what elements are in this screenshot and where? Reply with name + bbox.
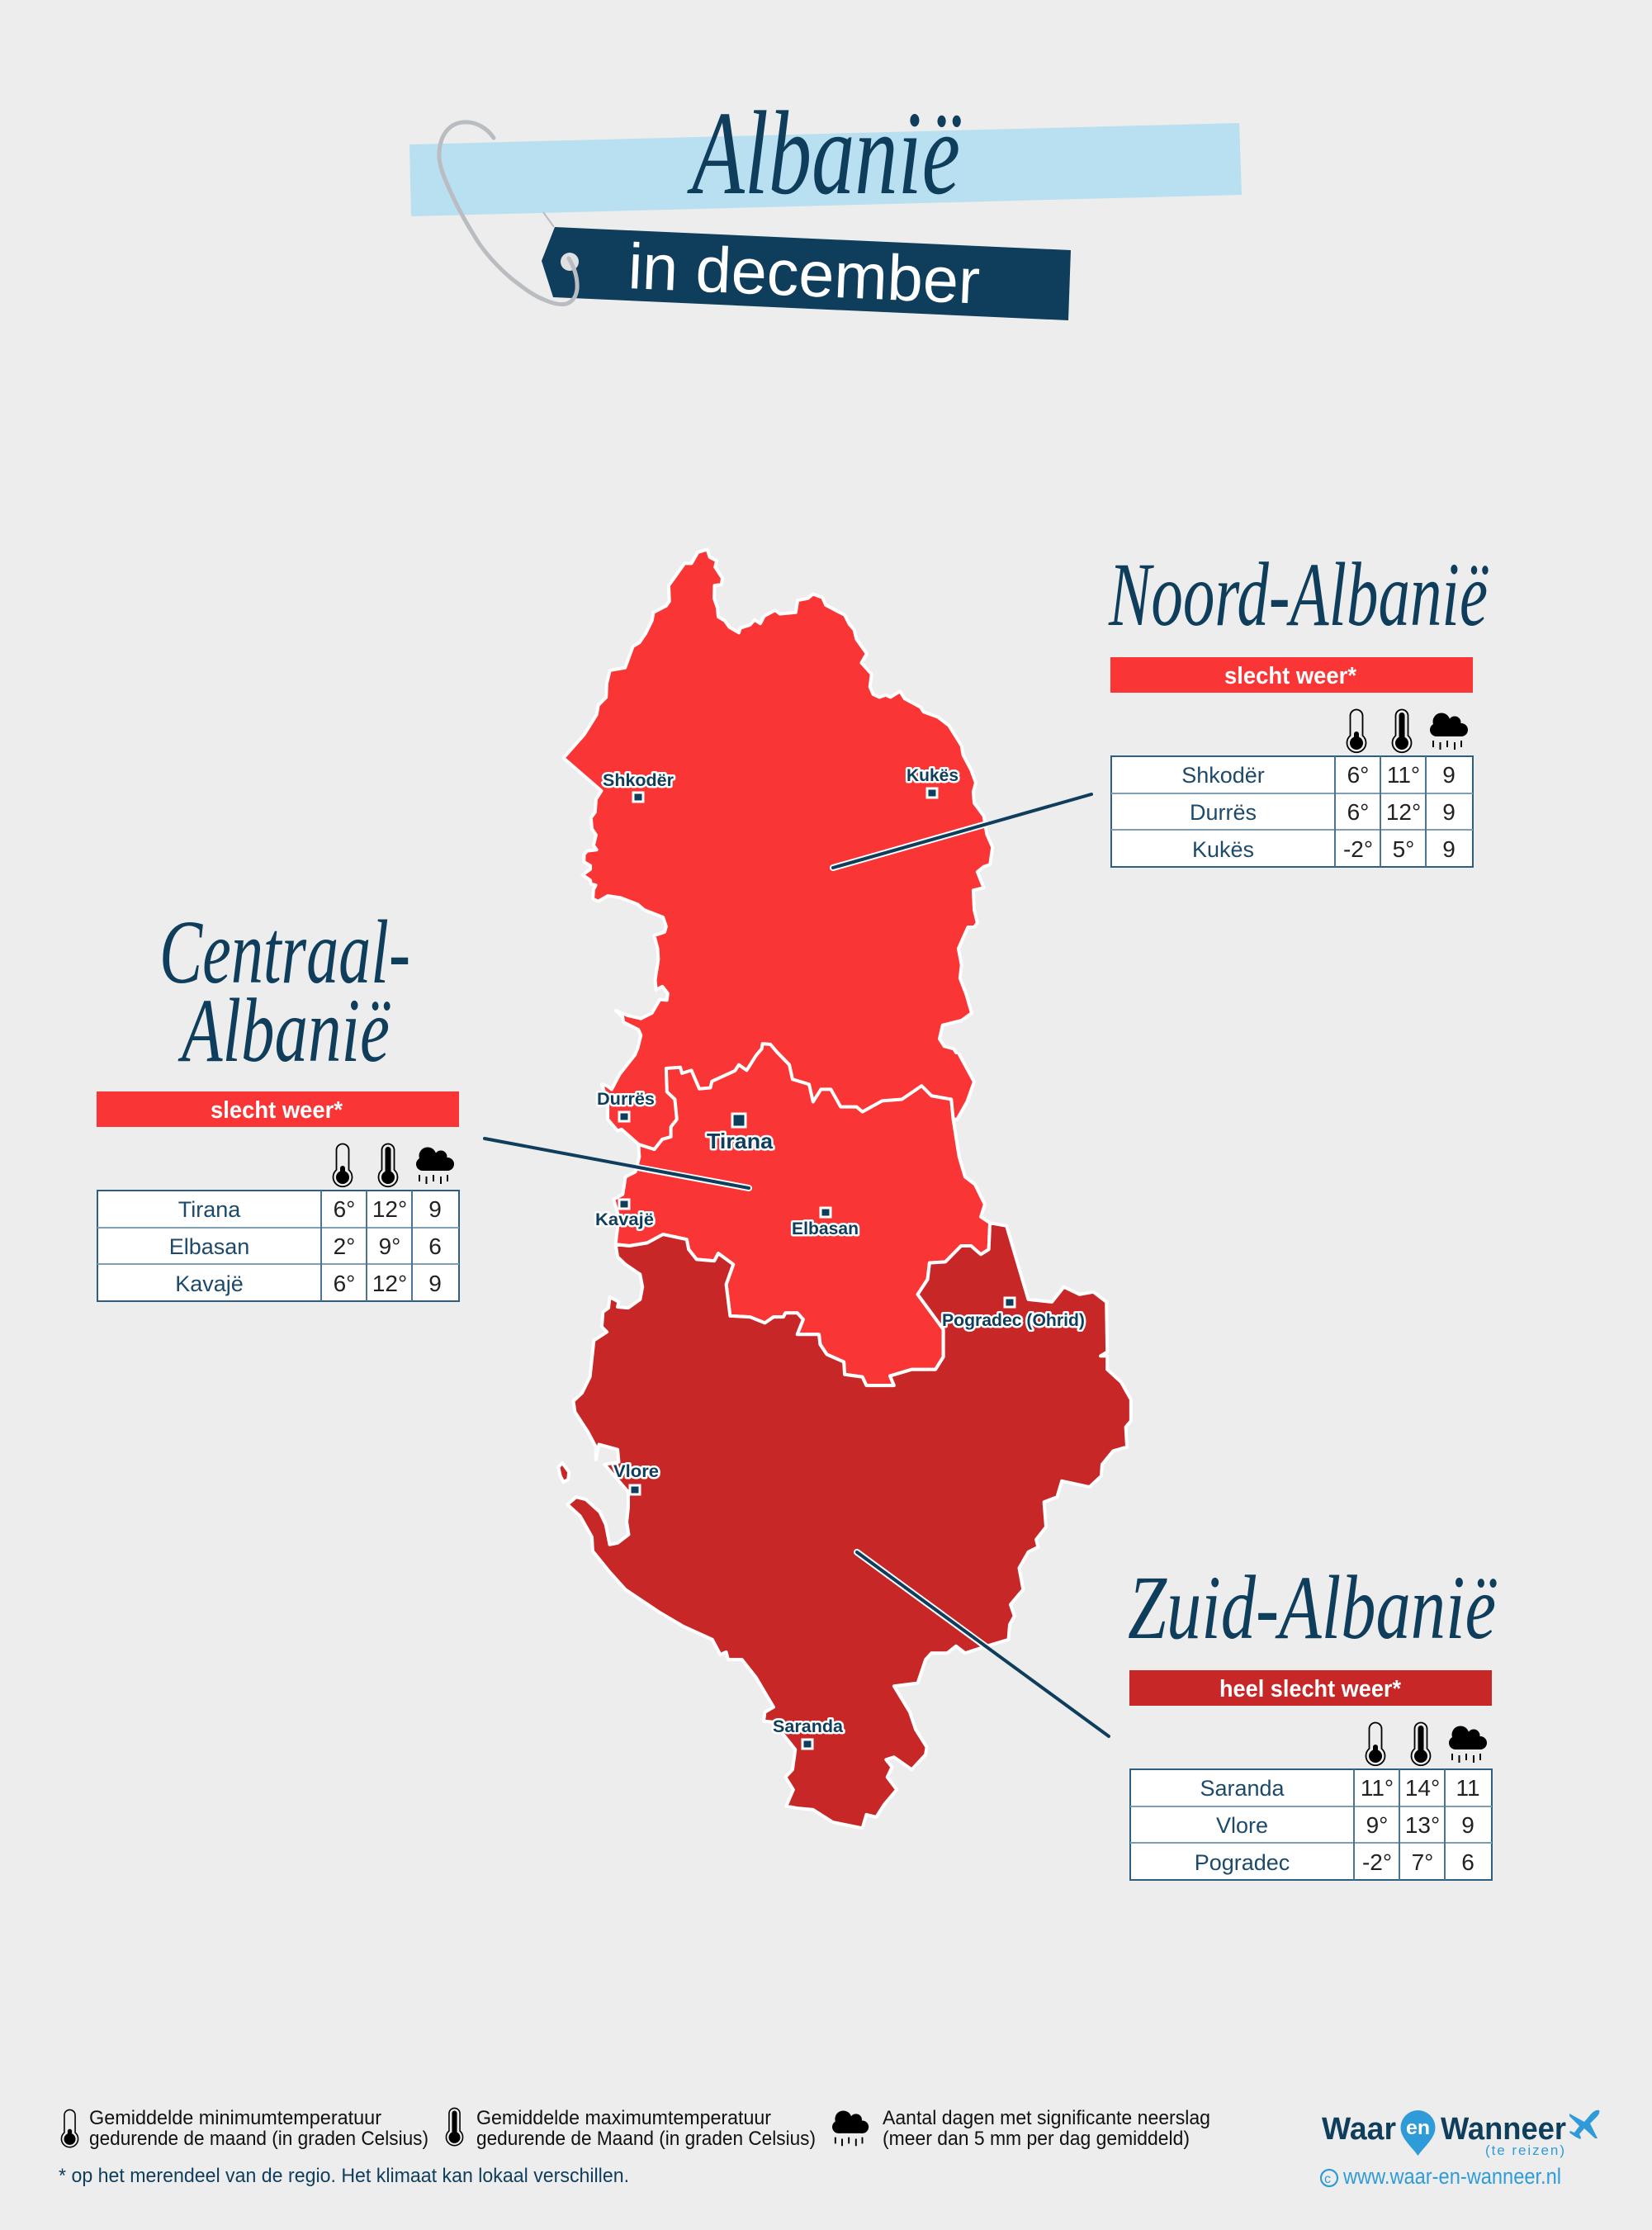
city: Kavajë xyxy=(595,1200,654,1229)
legend text: min temperature xyxy=(89,2107,428,2150)
icon: min temperature xyxy=(334,1144,352,1186)
climate table: 9° xyxy=(1366,1812,1388,1838)
climate table: Vlore xyxy=(1216,1813,1268,1838)
banner text: slecht weer* xyxy=(1224,663,1357,689)
panel: Centraal-Albanië xyxy=(97,1091,459,1301)
climate table: 5° xyxy=(1393,836,1414,862)
city: Tirana: Tirana xyxy=(707,1129,774,1153)
climate table: 9 xyxy=(428,1271,442,1296)
weather banner xyxy=(1129,1670,1492,1706)
logo word: Waar: Waar xyxy=(1322,2112,1396,2147)
weather banner xyxy=(97,1091,459,1127)
climate table: 9 xyxy=(1442,762,1456,788)
website: www.waar-en-wanneer.nl xyxy=(1342,2164,1561,2189)
weather banner xyxy=(1110,657,1473,693)
climate table xyxy=(1130,1769,1492,1880)
climate table: -2° xyxy=(1343,836,1373,862)
city: Pogradec xyxy=(942,1298,1085,1330)
legend text: min temperature: gedurende de maand (in graden Celsius) xyxy=(89,2128,428,2150)
legend text: rain days xyxy=(883,2107,1210,2150)
leader line: north xyxy=(833,794,1091,868)
icon: rain cloud xyxy=(416,1148,454,1184)
icon: legend min temperature xyxy=(61,2109,78,2147)
region: north upper xyxy=(564,549,992,1061)
string behind band xyxy=(543,212,554,227)
footnote: * op het merendeel van de regio. Het klimaat kan lokaal verschillen. xyxy=(59,2165,629,2187)
climate table: 6 xyxy=(428,1233,442,1259)
city: Elbasan xyxy=(792,1208,859,1238)
climate table: 7° xyxy=(1412,1849,1433,1875)
city: Elbasan: Elbasan xyxy=(792,1219,859,1238)
climate table: 12° xyxy=(1386,799,1421,825)
city: Tirana xyxy=(707,1114,774,1153)
legend xyxy=(61,2107,1210,2150)
light blue band xyxy=(409,123,1242,216)
icon: rain cloud xyxy=(1430,713,1468,750)
climate table: 11° xyxy=(1387,762,1420,788)
climate table: 6° xyxy=(334,1271,355,1296)
banner text: heel slecht weer* xyxy=(1219,1676,1402,1702)
climate table: Kukës xyxy=(1192,837,1254,862)
climate table: 11° xyxy=(1361,1775,1394,1801)
climate table: 9 xyxy=(428,1196,442,1222)
city: Durrës xyxy=(597,1090,655,1121)
icon: max temperature xyxy=(1392,710,1412,752)
city: Kavajë: Kavajë xyxy=(595,1210,654,1229)
legend text: max temperature: gedurende de Maand (in graden Celsius) xyxy=(476,2128,816,2150)
island xyxy=(558,1463,569,1482)
city: Kukës: Kukës xyxy=(906,766,959,785)
icon: min temperature xyxy=(1347,710,1366,752)
legend text: rain days: (meer dan 5 mm per dag gemiddeld) xyxy=(883,2128,1190,2150)
legend text: max temperature: Gemiddelde maximumtemperatuur xyxy=(476,2107,771,2129)
climate table: Pogradec xyxy=(1195,1850,1290,1875)
icon: max temperature xyxy=(1412,1722,1430,1765)
climate table: 6° xyxy=(1347,799,1369,825)
banner text: slecht weer* xyxy=(211,1097,343,1124)
climate table: Shkodër xyxy=(1181,763,1265,788)
city: Vlore: Vlore xyxy=(613,1462,659,1481)
heading: Albanië xyxy=(687,88,961,220)
tag hole xyxy=(561,253,579,271)
legend text: max temperature xyxy=(476,2107,816,2150)
heading: Zuid-Albanië: Zuid-Albanië xyxy=(1128,1557,1497,1658)
copyright symbol: c xyxy=(1324,2172,1331,2186)
heading: Centraal-Albanië xyxy=(159,902,410,1081)
icon: rain cloud xyxy=(1449,1726,1487,1763)
title block xyxy=(409,88,1242,320)
ring xyxy=(439,122,577,305)
climate table: 12° xyxy=(372,1196,407,1222)
legend text: min temperature: Gemiddelde minimumtemperatuur xyxy=(89,2107,381,2129)
climate table: Elbasan xyxy=(169,1234,249,1259)
climate table: 2° xyxy=(334,1233,355,1259)
climate table: 14° xyxy=(1405,1775,1440,1801)
icon: legend max temperature xyxy=(446,2108,463,2146)
city: Saranda xyxy=(773,1717,843,1749)
panel: Zuid-Albanië xyxy=(1129,1670,1492,1880)
logo xyxy=(1321,2110,1599,2189)
climate table: 11 xyxy=(1456,1775,1480,1801)
copyright symbol xyxy=(1321,2170,1337,2186)
heading: Centraal-Albanië: Albanië xyxy=(178,980,391,1081)
climate table: 9 xyxy=(1461,1812,1474,1838)
climate table: 13° xyxy=(1405,1812,1440,1838)
climate table: 9 xyxy=(1442,836,1456,862)
legend text: rain days: Aantal dagen met significante neerslag xyxy=(883,2107,1210,2129)
region: south xyxy=(567,1223,1131,1828)
logo pin xyxy=(1400,2110,1435,2156)
panel: Noord-Albanië xyxy=(1110,657,1473,867)
climate table: Saranda xyxy=(1200,1776,1285,1801)
subheading: in december xyxy=(627,230,982,318)
logo word: Wanneer: Wanneer xyxy=(1441,2112,1566,2147)
icon: plane xyxy=(1569,2110,1599,2139)
icon: max temperature xyxy=(378,1144,398,1186)
regions: lower part xyxy=(558,1044,1131,1828)
logo pin: en xyxy=(1406,2117,1430,2139)
climate table: 9° xyxy=(379,1233,400,1259)
climate table: 9 xyxy=(1442,799,1456,825)
climate table: Kavajë xyxy=(175,1271,244,1296)
heading: Noord-Albanië: Noord-Albanië xyxy=(1108,544,1489,645)
city: Pogradec: Pogradec (Ohrid) xyxy=(942,1311,1085,1330)
climate table: 12° xyxy=(372,1271,407,1296)
icon: legend rain cloud xyxy=(832,2110,869,2146)
tag xyxy=(542,227,1071,320)
city: Kukës xyxy=(906,766,959,798)
climate table: 6° xyxy=(334,1196,355,1222)
city: Shkodër: Shkodër xyxy=(603,771,674,790)
climate table: -2° xyxy=(1362,1849,1392,1875)
city: Saranda: Saranda xyxy=(773,1717,843,1736)
leader line: central xyxy=(485,1139,749,1188)
climate table xyxy=(97,1191,459,1301)
icon: min temperature xyxy=(1366,1722,1385,1765)
heading: Centraal-Albanië: Centraal- xyxy=(159,902,410,1002)
city: Vlore xyxy=(613,1462,659,1494)
border north-central xyxy=(638,1044,954,1149)
map of Albania xyxy=(558,549,1131,1828)
climate table: Tirana xyxy=(178,1197,241,1222)
climate table: Durrës xyxy=(1190,800,1257,825)
city: Durrës: Durrës xyxy=(597,1090,655,1109)
city: Shkodër xyxy=(603,771,674,802)
climate table: 6 xyxy=(1461,1849,1474,1875)
climate table: 6° xyxy=(1347,762,1369,788)
leader line: south xyxy=(857,1552,1109,1736)
region: north lower and central xyxy=(602,1054,990,1385)
logo tagline: (te reizen) xyxy=(1485,2142,1564,2158)
climate table xyxy=(1111,756,1473,867)
